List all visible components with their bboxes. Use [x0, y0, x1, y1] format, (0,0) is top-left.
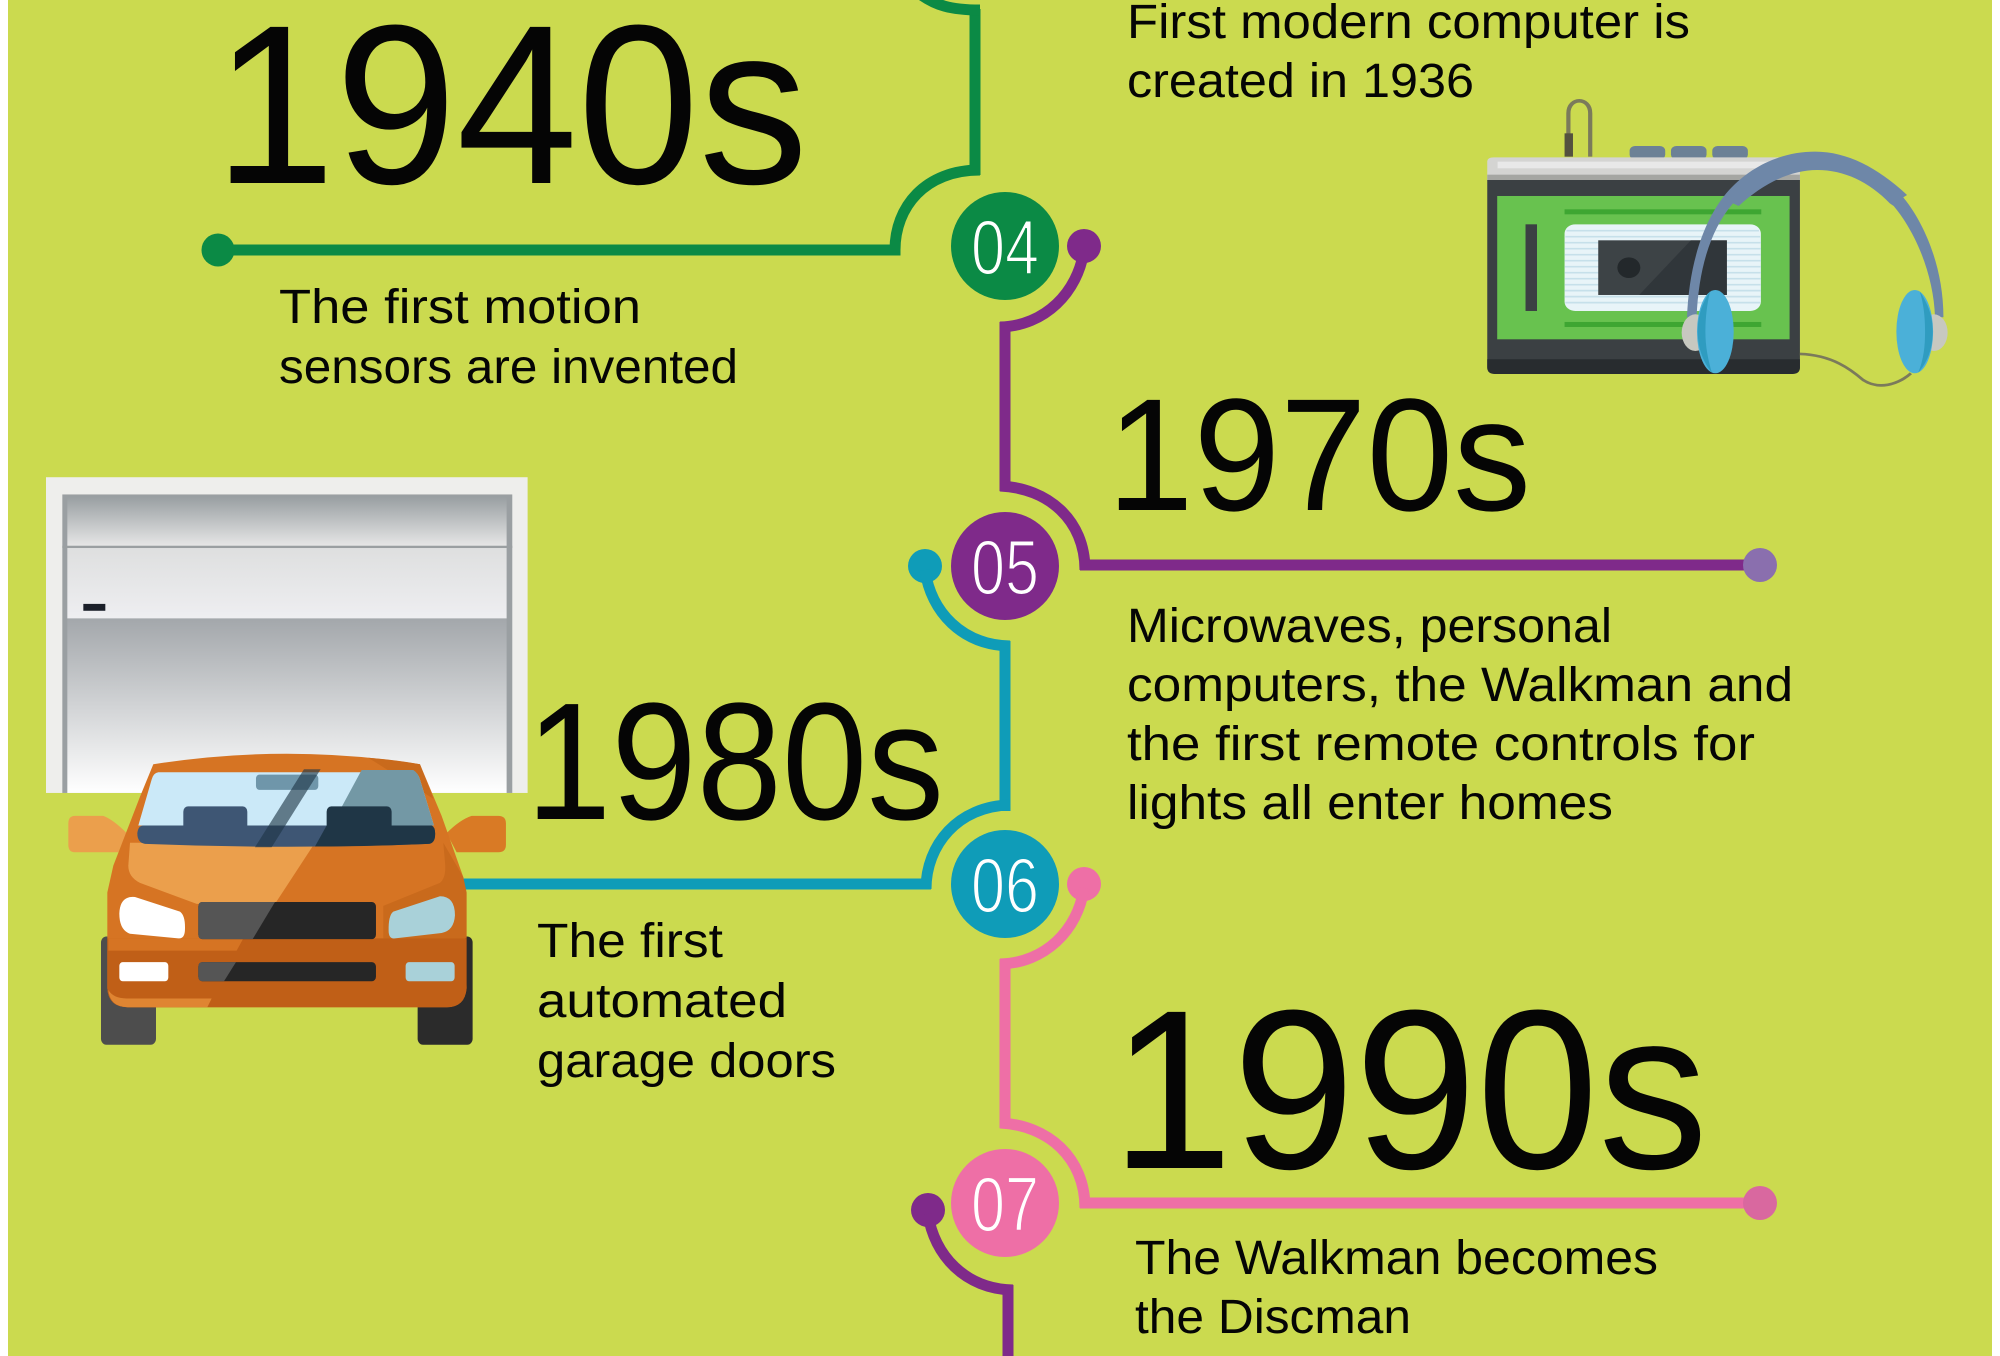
icon: garage door	[46, 477, 528, 793]
text: 1980s description: The first	[537, 915, 723, 968]
text: 1940s description	[279, 281, 738, 394]
text: 1980s description: garage doors	[537, 1035, 836, 1088]
heading: 1990s: 1990s	[1111, 964, 1708, 1217]
text: 1970s description: computers, the Walkman and	[1127, 659, 1793, 712]
text: 1970s description: the first remote controls for	[1127, 718, 1755, 771]
icon: orange car	[68, 754, 506, 1045]
text: first modern computer: created in 1936	[1127, 55, 1474, 108]
text: 1970s description: lights all enter homes	[1127, 777, 1613, 830]
text: 1990s description: The Walkman becomes	[1135, 1232, 1658, 1285]
text: 1940s description: sensors are invented	[279, 341, 738, 394]
text: 1990s description	[1135, 1232, 1658, 1344]
text: 1980s description	[537, 915, 836, 1088]
icon: walkman cassette player with headphones	[1487, 101, 1948, 385]
text: first modern computer	[1127, 0, 1690, 108]
step badge 06	[951, 830, 1059, 938]
step badge 05: 05	[971, 523, 1039, 611]
text: 1990s description: the Discman	[1135, 1291, 1411, 1344]
text: 1940s description: The first motion	[279, 281, 641, 334]
step badge 07	[951, 1149, 1059, 1257]
timeline connector: 1990s pink	[1000, 867, 1777, 1220]
step badge 05	[951, 512, 1059, 620]
text: 1980s description: automated	[537, 975, 787, 1028]
heading: 1970s: 1970s	[1107, 365, 1531, 544]
step badge 04	[951, 192, 1059, 300]
timeline connector: 1970s purple	[1000, 229, 1777, 582]
timeline connector: 1980s teal	[440, 549, 1010, 889]
step badge 07: 07	[971, 1160, 1039, 1248]
text: 1970s description	[1127, 600, 1793, 830]
timeline connector: 1940s green	[202, 0, 980, 266]
timeline connector: next purple	[911, 1193, 1013, 1356]
text: 1970s description: Microwaves, personal	[1127, 600, 1612, 653]
heading: 1980s: 1980s	[526, 669, 944, 855]
step badge 04: 04	[971, 203, 1039, 291]
step badge 06: 06	[971, 841, 1039, 929]
